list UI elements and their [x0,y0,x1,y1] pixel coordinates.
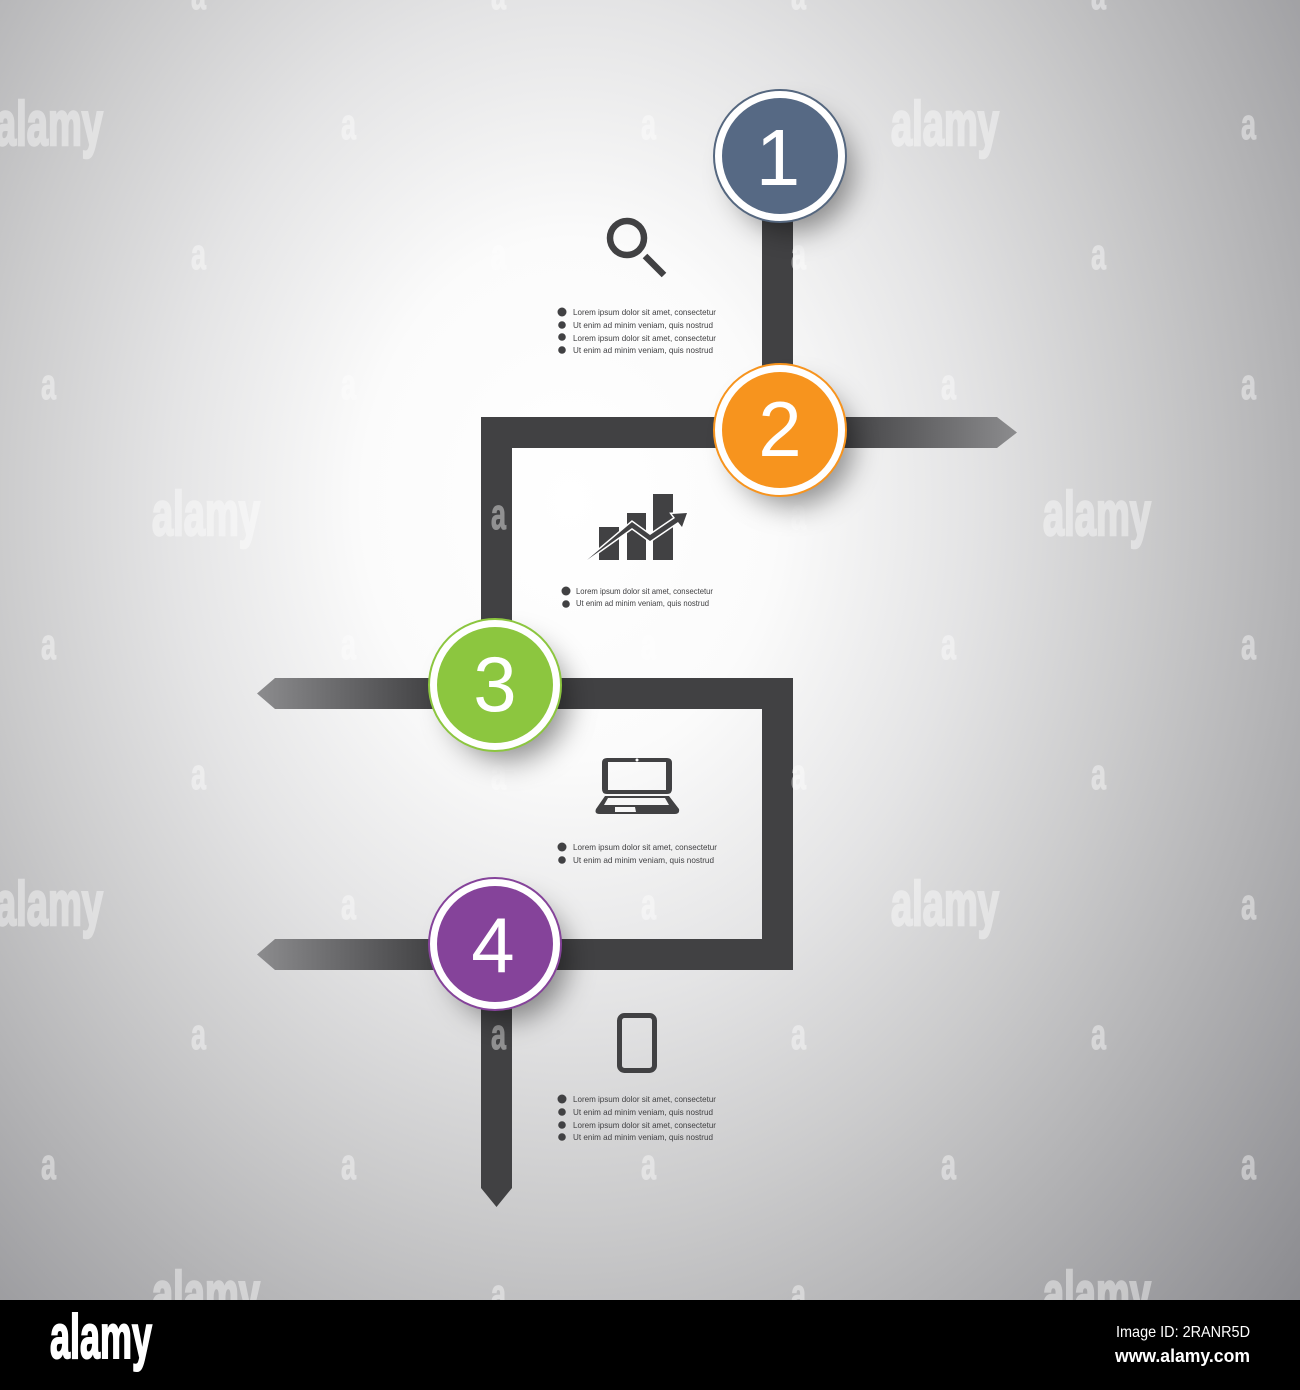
watermarks: a [941,1140,956,1189]
text block: step 1: Ut enim ad minim veniam, quis nostrud [573,345,713,355]
text block: step 1: Lorem ipsum dolor sit amet, consectetur [573,333,716,343]
watermarks: a [1091,750,1106,799]
watermarks: a [641,880,656,929]
text block: step 4: Lorem ipsum dolor sit amet, consectetur [573,1120,716,1130]
step 3 badge [429,619,568,761]
step 4 badge [429,878,568,1020]
watermarks: a [941,620,956,669]
watermarks: a [791,1270,806,1319]
watermarks: a [191,230,206,279]
step 3 badge: 3 [473,640,517,728]
watermarks: a [641,620,656,669]
watermarks: alamy [152,1260,260,1329]
watermarks: a [41,360,56,409]
step 2 badge: 2 [758,385,802,473]
icon: smartphone [620,1016,654,1070]
text block: step 1: Lorem ipsum dolor sit amet, consectetur [573,307,716,317]
step 1 badge [714,90,853,232]
website: www.alamy.com [1114,1346,1250,1366]
watermarks: a [341,360,356,409]
watermarks: a [641,100,656,149]
watermarks: a [1241,1140,1256,1189]
watermarks: a [491,1270,506,1319]
watermarks: a [1241,100,1256,149]
watermarks: a [791,1010,806,1059]
text block: step 2: Ut enim ad minim veniam, quis nostrud [576,598,709,608]
watermarks: a [791,230,806,279]
watermarks: a [341,880,356,929]
watermarks: a [341,620,356,669]
watermarks: a [491,490,506,539]
watermarks: a [1241,620,1256,669]
timeline connector [257,215,1017,1207]
icon: laptop [596,758,679,814]
footer bar [0,1300,1300,1390]
text block: step 4: Ut enim ad minim veniam, quis nostrud [573,1132,713,1142]
watermarks: a [41,620,56,669]
text block: step 4 [558,1094,716,1142]
text block: step 2 [562,586,713,608]
footer logo: alamy [50,1303,152,1372]
watermarks: a [191,1010,206,1059]
watermarks: a [791,490,806,539]
watermarks: a [41,1140,56,1189]
watermarks: alamy [152,480,260,549]
watermarks: a [641,1140,656,1189]
watermarks: a [791,750,806,799]
watermarks: alamy [0,90,103,159]
text block: step 2: Lorem ipsum dolor sit amet, consectetur [576,586,713,596]
watermarks: alamy [1043,1260,1151,1329]
watermarks: alamy [1043,480,1151,549]
step 4 badge: 4 [471,901,515,989]
text block: step 1 [558,307,716,355]
watermarks: a [491,230,506,279]
watermarks: alamy [891,870,999,939]
watermarks: a [491,1010,506,1059]
icon: bar chart with arrow [587,494,687,560]
watermarks: alamy [0,870,103,939]
watermarks: a [1091,230,1106,279]
image id: Image ID: 2RANR5D [1116,1324,1250,1341]
watermarks: a [341,100,356,149]
text block: step 3 [558,842,717,865]
icon: magnifying glass [610,221,664,275]
watermarks: a [491,750,506,799]
watermarks: a [341,1140,356,1189]
watermarks: a [1091,1010,1106,1059]
text block: step 4: Ut enim ad minim veniam, quis nostrud [573,1107,713,1117]
watermarks: a [1241,880,1256,929]
text block: step 4: Lorem ipsum dolor sit amet, consectetur [573,1094,716,1104]
watermarks: a [941,360,956,409]
text block: step 3: Lorem ipsum dolor sit amet, consectetur [573,842,717,852]
text block: step 3: Ut enim ad minim veniam, quis nostrud [573,855,714,865]
watermarks: a [1241,360,1256,409]
watermarks: a [191,750,206,799]
watermarks: alamy [891,90,999,159]
step 1 badge: 1 [756,113,800,202]
text block: step 1: Ut enim ad minim veniam, quis nostrud [573,320,713,330]
step 2 badge [714,364,853,506]
